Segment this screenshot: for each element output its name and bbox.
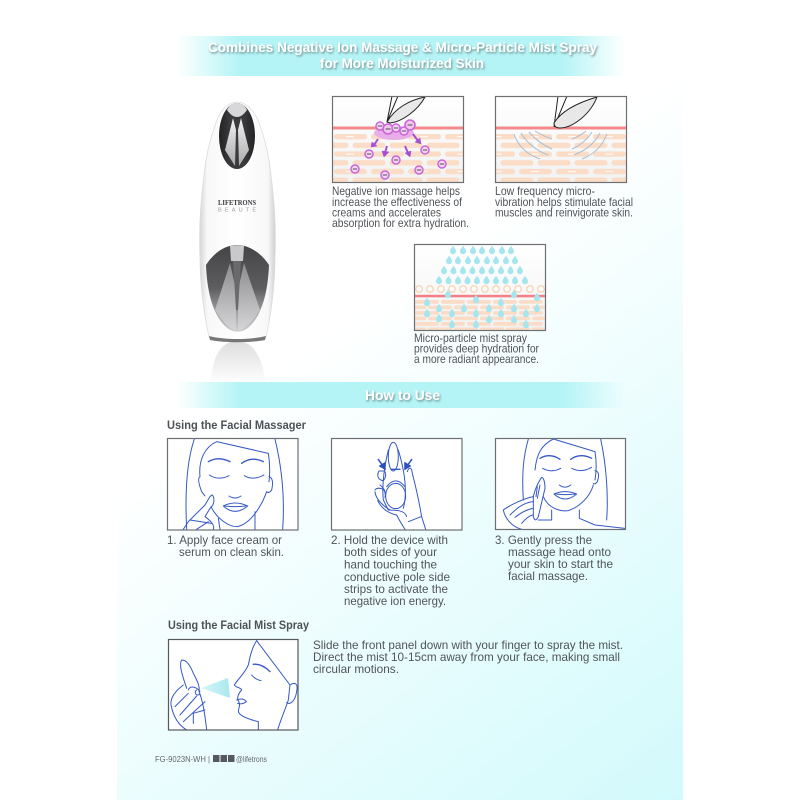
- mist droplets: [436, 246, 528, 284]
- how to use banner: How to Use: [365, 387, 440, 403]
- text: step 3: massage head onto: [508, 545, 611, 559]
- text: step 3: [495, 533, 613, 583]
- product photo: device: [200, 102, 275, 384]
- skin surface: [332, 126, 463, 130]
- title banner: for More Moisturized Skin: [320, 55, 484, 71]
- text: micro-vibration: Low frequency micro-: [495, 184, 595, 198]
- logo: LIFETRONS: [218, 199, 256, 207]
- ion absorption blob: [374, 126, 414, 140]
- text: step 3: your skin to start the: [508, 557, 613, 571]
- text: negative ion massage: increase the effectiveness of: [332, 195, 463, 209]
- text: step 2: 2. Hold the device with: [331, 533, 448, 547]
- text: step 2: negative ion energy.: [344, 594, 446, 608]
- skin cells: [495, 134, 626, 182]
- text: step 2: strips to activate the: [344, 582, 448, 596]
- heading: using the facial mist spray: Using the Facial Mist Spray: [168, 620, 310, 632]
- text: mist instructions: Direct the mist 10-15cm away from your face, making small: [313, 650, 620, 664]
- text: micro-vibration: [495, 184, 633, 220]
- text: negative ion massage: absorption for extra hydration.: [332, 216, 469, 230]
- panel: mist spray diagram: [414, 244, 546, 330]
- text: step 1: [167, 533, 284, 559]
- massager tip: [554, 96, 597, 128]
- logo: [218, 199, 256, 214]
- illustration: hold device: [332, 438, 462, 530]
- footer: model number and social handle: FG-9023N-WH |: [155, 755, 210, 764]
- title banner: [177, 36, 625, 76]
- illustration: press massage head: [496, 438, 626, 530]
- text: mist instructions: [313, 638, 623, 676]
- reflection: [211, 341, 265, 384]
- social icons: [213, 755, 234, 762]
- text: negative ion massage: [332, 184, 469, 230]
- text: step 1: 1. Apply face cream or: [167, 533, 282, 547]
- text: step 2: hand touching the: [344, 558, 437, 572]
- title banner: Combines Negative Ion Massage & Micro-Particle Mist Spray: [208, 39, 597, 55]
- skin surface: [414, 295, 545, 297]
- squeeze arrows: [378, 459, 412, 469]
- massager tip: [387, 96, 425, 123]
- text: micro-vibration: muscles and reinvigorate skin.: [495, 206, 633, 220]
- device body: [200, 102, 275, 341]
- text: step 2: both sides of your: [344, 545, 437, 559]
- mist cone: [201, 678, 230, 698]
- surface rings: [416, 286, 544, 292]
- page background: [117, 0, 683, 800]
- text: mist spray: [414, 331, 539, 366]
- ions: [351, 120, 446, 179]
- arrows: [371, 134, 421, 157]
- footer: model number and social handle: [155, 755, 267, 764]
- text: step 2: [331, 533, 450, 608]
- text: micro-vibration: vibration helps stimulate facial: [495, 195, 633, 209]
- skin surface: [495, 126, 626, 130]
- massage head: [219, 103, 255, 169]
- illustration: apply cream: [168, 438, 298, 530]
- spray panel: [206, 245, 269, 332]
- text: step 3: 3. Gently press the: [495, 533, 592, 547]
- absorbed droplets: [424, 290, 540, 328]
- footer: model number and social handle: @lifetrons: [236, 755, 267, 764]
- skin cells: [332, 134, 463, 182]
- text: mist spray: a more radiant appearance.: [414, 352, 539, 366]
- text: step 1: serum on clean skin.: [179, 545, 284, 559]
- text: mist instructions: circular motions.: [313, 662, 399, 676]
- panel: negative ion massage diagram: [332, 96, 464, 182]
- logo: BEAUTÉ: [218, 206, 256, 214]
- text: mist instructions: Slide the front panel down with your finger to spray the mist.: [313, 638, 623, 652]
- text: step 3: facial massage.: [508, 569, 588, 583]
- illustration: mist spray: [168, 640, 298, 730]
- panel: micro-vibration diagram: [495, 96, 626, 182]
- vibration waves: [514, 131, 607, 159]
- skin cells: [414, 300, 545, 330]
- text: negative ion massage: Negative ion massage helps: [332, 184, 460, 198]
- text: mist spray: provides deep hydration for: [414, 342, 539, 356]
- text: negative ion massage: creams and accelerates: [332, 206, 441, 220]
- text: mist spray: Micro-particle mist spray: [414, 331, 527, 345]
- how to use banner: [177, 382, 625, 408]
- heading: using the facial massager: Using the Facial Massager: [167, 420, 306, 432]
- text: step 2: conductive pole side: [344, 570, 450, 584]
